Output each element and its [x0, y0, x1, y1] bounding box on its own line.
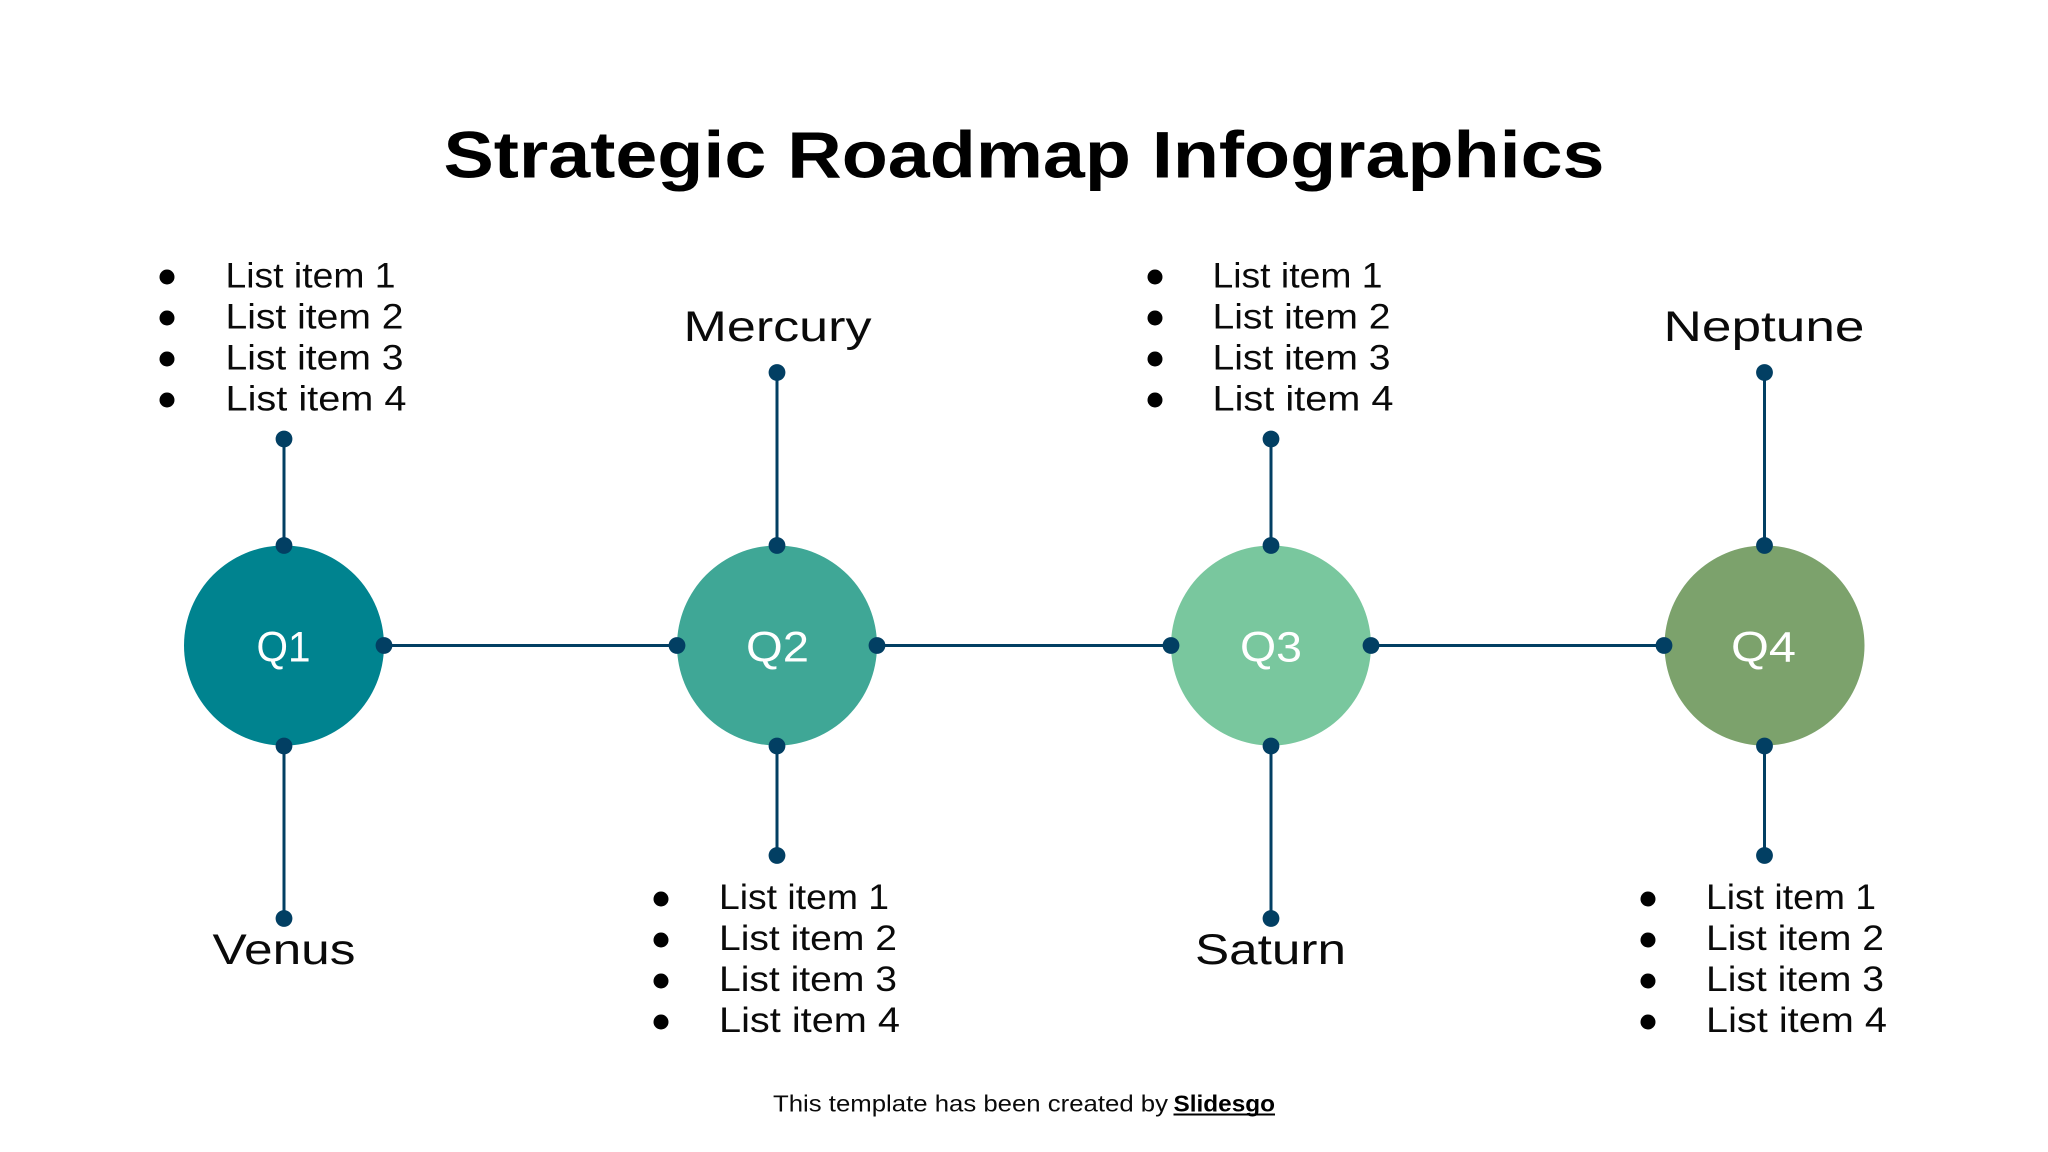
Q4 connector dots — [1656, 364, 1773, 864]
Q2 label: Q2 — [746, 624, 809, 672]
Q3 list: List item 2 — [1212, 298, 1390, 336]
Q2 list — [654, 878, 900, 1040]
Q2 connector dots — [669, 364, 885, 864]
title: Strategic Roadmap Infographics — [444, 118, 1604, 192]
Q1 list: List item 2 — [226, 298, 404, 336]
Q4 stems — [1763, 372, 1766, 856]
Q4 list: List item 2 — [1706, 919, 1884, 958]
Q3 name: Saturn — [1195, 926, 1346, 974]
footer credit: Slidesgo — [1174, 1090, 1275, 1116]
Q4 name: Neptune — [1664, 303, 1864, 351]
Q1 list: List item 1 — [226, 256, 396, 296]
horizontal timeline connectors — [384, 644, 1664, 647]
Q2 list: List item 4 — [719, 1001, 900, 1040]
Q2 list: List item 3 — [719, 960, 897, 999]
Q2 name: Mercury — [684, 303, 872, 351]
Q3 list: List item 1 — [1212, 256, 1382, 296]
Q1 stems — [282, 439, 286, 918]
Q1 connector dots — [276, 431, 392, 927]
Q4 list: List item 1 — [1706, 878, 1876, 917]
Q2 circle — [677, 546, 877, 746]
Q4 label: Q4 — [1731, 624, 1796, 672]
Q3 list: List item 4 — [1212, 380, 1394, 418]
Q3 connector dots — [1163, 431, 1379, 927]
Q1 list: List item 4 — [226, 380, 406, 418]
Q3 circle — [1171, 546, 1371, 746]
panel: Q3 Saturn — [1148, 256, 1394, 974]
footer credit: This template has been created by — [773, 1090, 1168, 1116]
Q1 label: Q1 — [256, 624, 310, 672]
Q2 list: List item 2 — [719, 919, 897, 958]
panel: Q4 Neptune — [1640, 303, 1887, 1040]
Q1 circle — [184, 546, 384, 746]
panel: Q2 Mercury — [654, 303, 900, 1040]
Q2 list: List item 1 — [719, 878, 889, 917]
Q1 name: Venus — [212, 926, 356, 974]
Q3 label: Q3 — [1240, 624, 1302, 672]
panel: Q1 Venus — [160, 256, 406, 974]
Q3 list: List item 3 — [1212, 338, 1390, 378]
Q1 list: List item 3 — [226, 338, 404, 378]
Q4 list — [1640, 878, 1887, 1040]
Q4 circle — [1664, 546, 1864, 746]
Q1 list — [160, 256, 406, 418]
Q3 list — [1148, 256, 1394, 418]
Q4 list: List item 3 — [1706, 960, 1884, 999]
Q2 stems — [776, 372, 778, 856]
Q3 stems — [1270, 439, 1272, 918]
Q4 list: List item 4 — [1706, 1001, 1887, 1040]
